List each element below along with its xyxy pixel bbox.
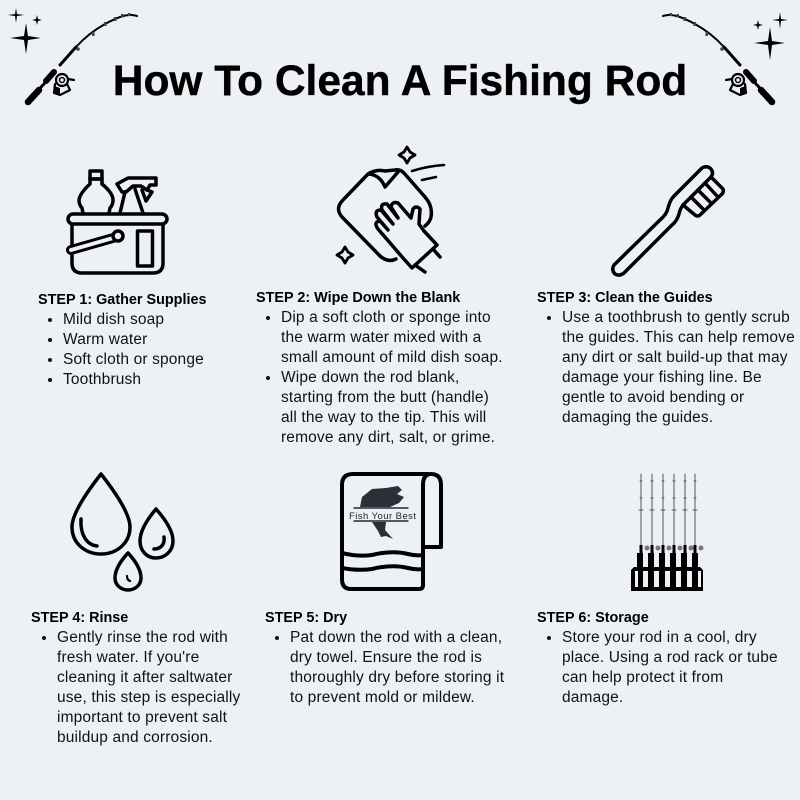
icon: bucket of supplies — [68, 171, 167, 273]
text block: step 2: starting from the butt (handle) — [281, 389, 489, 406]
text block: step 3: Use a toothbrush to gently scrub — [562, 309, 790, 326]
text block: step 1: Warm water — [63, 331, 147, 348]
text block: step 2: remove any dirt, salt, or grime. — [281, 429, 495, 446]
text block: step 3: STEP 3: Clean the Guides — [537, 290, 713, 306]
text block: step 6: can help protect it from — [562, 669, 723, 686]
text block: step 4: use, this step is especially — [57, 689, 240, 706]
text block: step 3: any dirt or salt build-up that may — [562, 349, 788, 366]
text block: step 6: damage. — [562, 689, 623, 706]
text block: step 5: STEP 5: Dry — [265, 610, 347, 626]
text block: step 2: Wipe down the rod blank, — [281, 369, 460, 386]
icon: toothbrush — [613, 167, 723, 275]
text block: step 2 — [256, 290, 503, 446]
icon: right sparkles — [753, 12, 788, 60]
text block: step 5: dry towel. Ensure the rod is — [290, 649, 482, 666]
text block: step 3: damaging the guides. — [562, 409, 713, 426]
text block: step 5: thoroughly dry before storing it — [290, 669, 504, 686]
text block: step 4: important to prevent salt — [57, 709, 227, 726]
text block: step 2: all the way to the tip. This will — [281, 409, 486, 426]
text block: step 6: Store your rod in a cool, dry — [562, 629, 757, 646]
text block: step 3: damage your fishing line. Be — [562, 369, 762, 386]
text block: step 4: fresh water. If you're — [57, 649, 199, 666]
text block: step 6 — [537, 610, 778, 706]
text block: step 6: place. Using a rod rack or tube — [562, 649, 778, 666]
text block: step 5: Pat down the rod with a clean, — [290, 629, 502, 646]
icon: left fishing rod — [28, 13, 137, 102]
title: How To Clean A Fishing Rod — [113, 58, 687, 105]
text block: step 4: Gently rinse the rod with — [57, 629, 228, 646]
icon: rod storage rack — [631, 474, 704, 591]
text block: step 4: buildup and corrosion. — [57, 729, 213, 746]
icon: right fishing rod — [663, 13, 772, 102]
text block: step 1 — [38, 292, 206, 388]
icon: left sparkles — [8, 8, 42, 54]
text block: step 2: small amount of mild dish soap. — [281, 349, 503, 366]
text block: step 6: STEP 6: Storage — [537, 610, 649, 626]
icon: towel with fish logo — [342, 474, 441, 589]
text block: step 5: to prevent mold or mildew. — [290, 689, 475, 706]
icon: water drops — [72, 474, 173, 590]
text block: step 2: Dip a soft cloth or sponge into — [281, 309, 491, 326]
text block: step 3: gentle to avoid bending or — [562, 389, 744, 406]
fish logo: Fish Your Best — [349, 511, 416, 522]
text block: step 2: the warm water mixed with a — [281, 329, 481, 346]
text block: step 3: the guides. This can help remove — [562, 329, 795, 346]
text block: step 4: cleaning it after saltwater — [57, 669, 232, 686]
text block: step 1: STEP 1: Gather Supplies — [38, 292, 206, 308]
text block: step 4 — [31, 610, 240, 746]
text block: step 1: Soft cloth or sponge — [63, 351, 204, 368]
icon: hand wiping with cloth — [337, 147, 444, 272]
text block: step 1: Toothbrush — [63, 371, 141, 388]
text block: step 1: Mild dish soap — [63, 311, 164, 328]
text block: step 5 — [265, 610, 504, 706]
text block: step 4: STEP 4: Rinse — [31, 610, 128, 626]
text block: step 2: STEP 2: Wipe Down the Blank — [256, 290, 460, 306]
text block: step 3 — [537, 290, 795, 426]
